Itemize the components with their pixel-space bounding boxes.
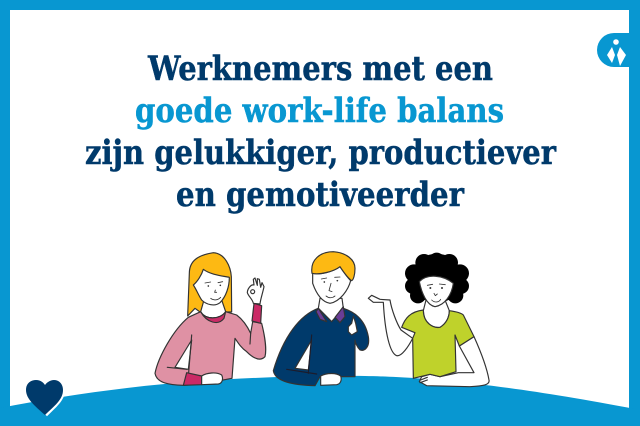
- fingers: [420, 377, 427, 383]
- OK hand: [247, 278, 264, 304]
- facial features: [427, 284, 445, 302]
- sweater: [273, 308, 369, 386]
- table: [0, 376, 640, 426]
- curly hair: [405, 253, 469, 303]
- hair: [188, 253, 232, 316]
- collar: [201, 312, 226, 322]
- collar: [316, 307, 345, 323]
- neck: [318, 298, 343, 322]
- title: Werknemers met een: [147, 49, 493, 89]
- figure: man with navy sweater and thumbs up: [273, 252, 369, 386]
- sweater folds: [287, 335, 317, 374]
- sweater folds: [167, 333, 251, 377]
- face: [313, 267, 351, 303]
- title: en gemotiveerder: [176, 175, 465, 215]
- title: zijn gelukkiger, productiever: [85, 133, 557, 173]
- face: [193, 269, 229, 305]
- figure: woman with blonde hair making OK sign: [155, 253, 266, 385]
- neck: [423, 300, 449, 327]
- sweater: [155, 312, 266, 385]
- logo tab: [597, 33, 630, 67]
- title: [85, 49, 557, 215]
- arm gap: [175, 340, 192, 369]
- resting arm: [419, 337, 489, 387]
- upper cuff: [252, 303, 262, 323]
- lower hand: [321, 373, 341, 385]
- title: goede work-life balans: [135, 91, 504, 131]
- raised arm: [368, 295, 413, 356]
- facial features: [321, 277, 340, 298]
- face: [419, 276, 453, 307]
- facial features: [205, 282, 223, 300]
- thumbs up hand: [348, 316, 357, 335]
- lower hand: [202, 373, 223, 385]
- figure: woman with curly black hair and green shirt: [368, 253, 489, 387]
- green shirt: [402, 310, 474, 378]
- arm gap: [295, 340, 312, 370]
- lower cuff: [183, 373, 202, 385]
- icon: person logo: [607, 39, 626, 66]
- icon: heart: [26, 380, 65, 416]
- neck: [201, 300, 226, 318]
- hair: [312, 252, 355, 281]
